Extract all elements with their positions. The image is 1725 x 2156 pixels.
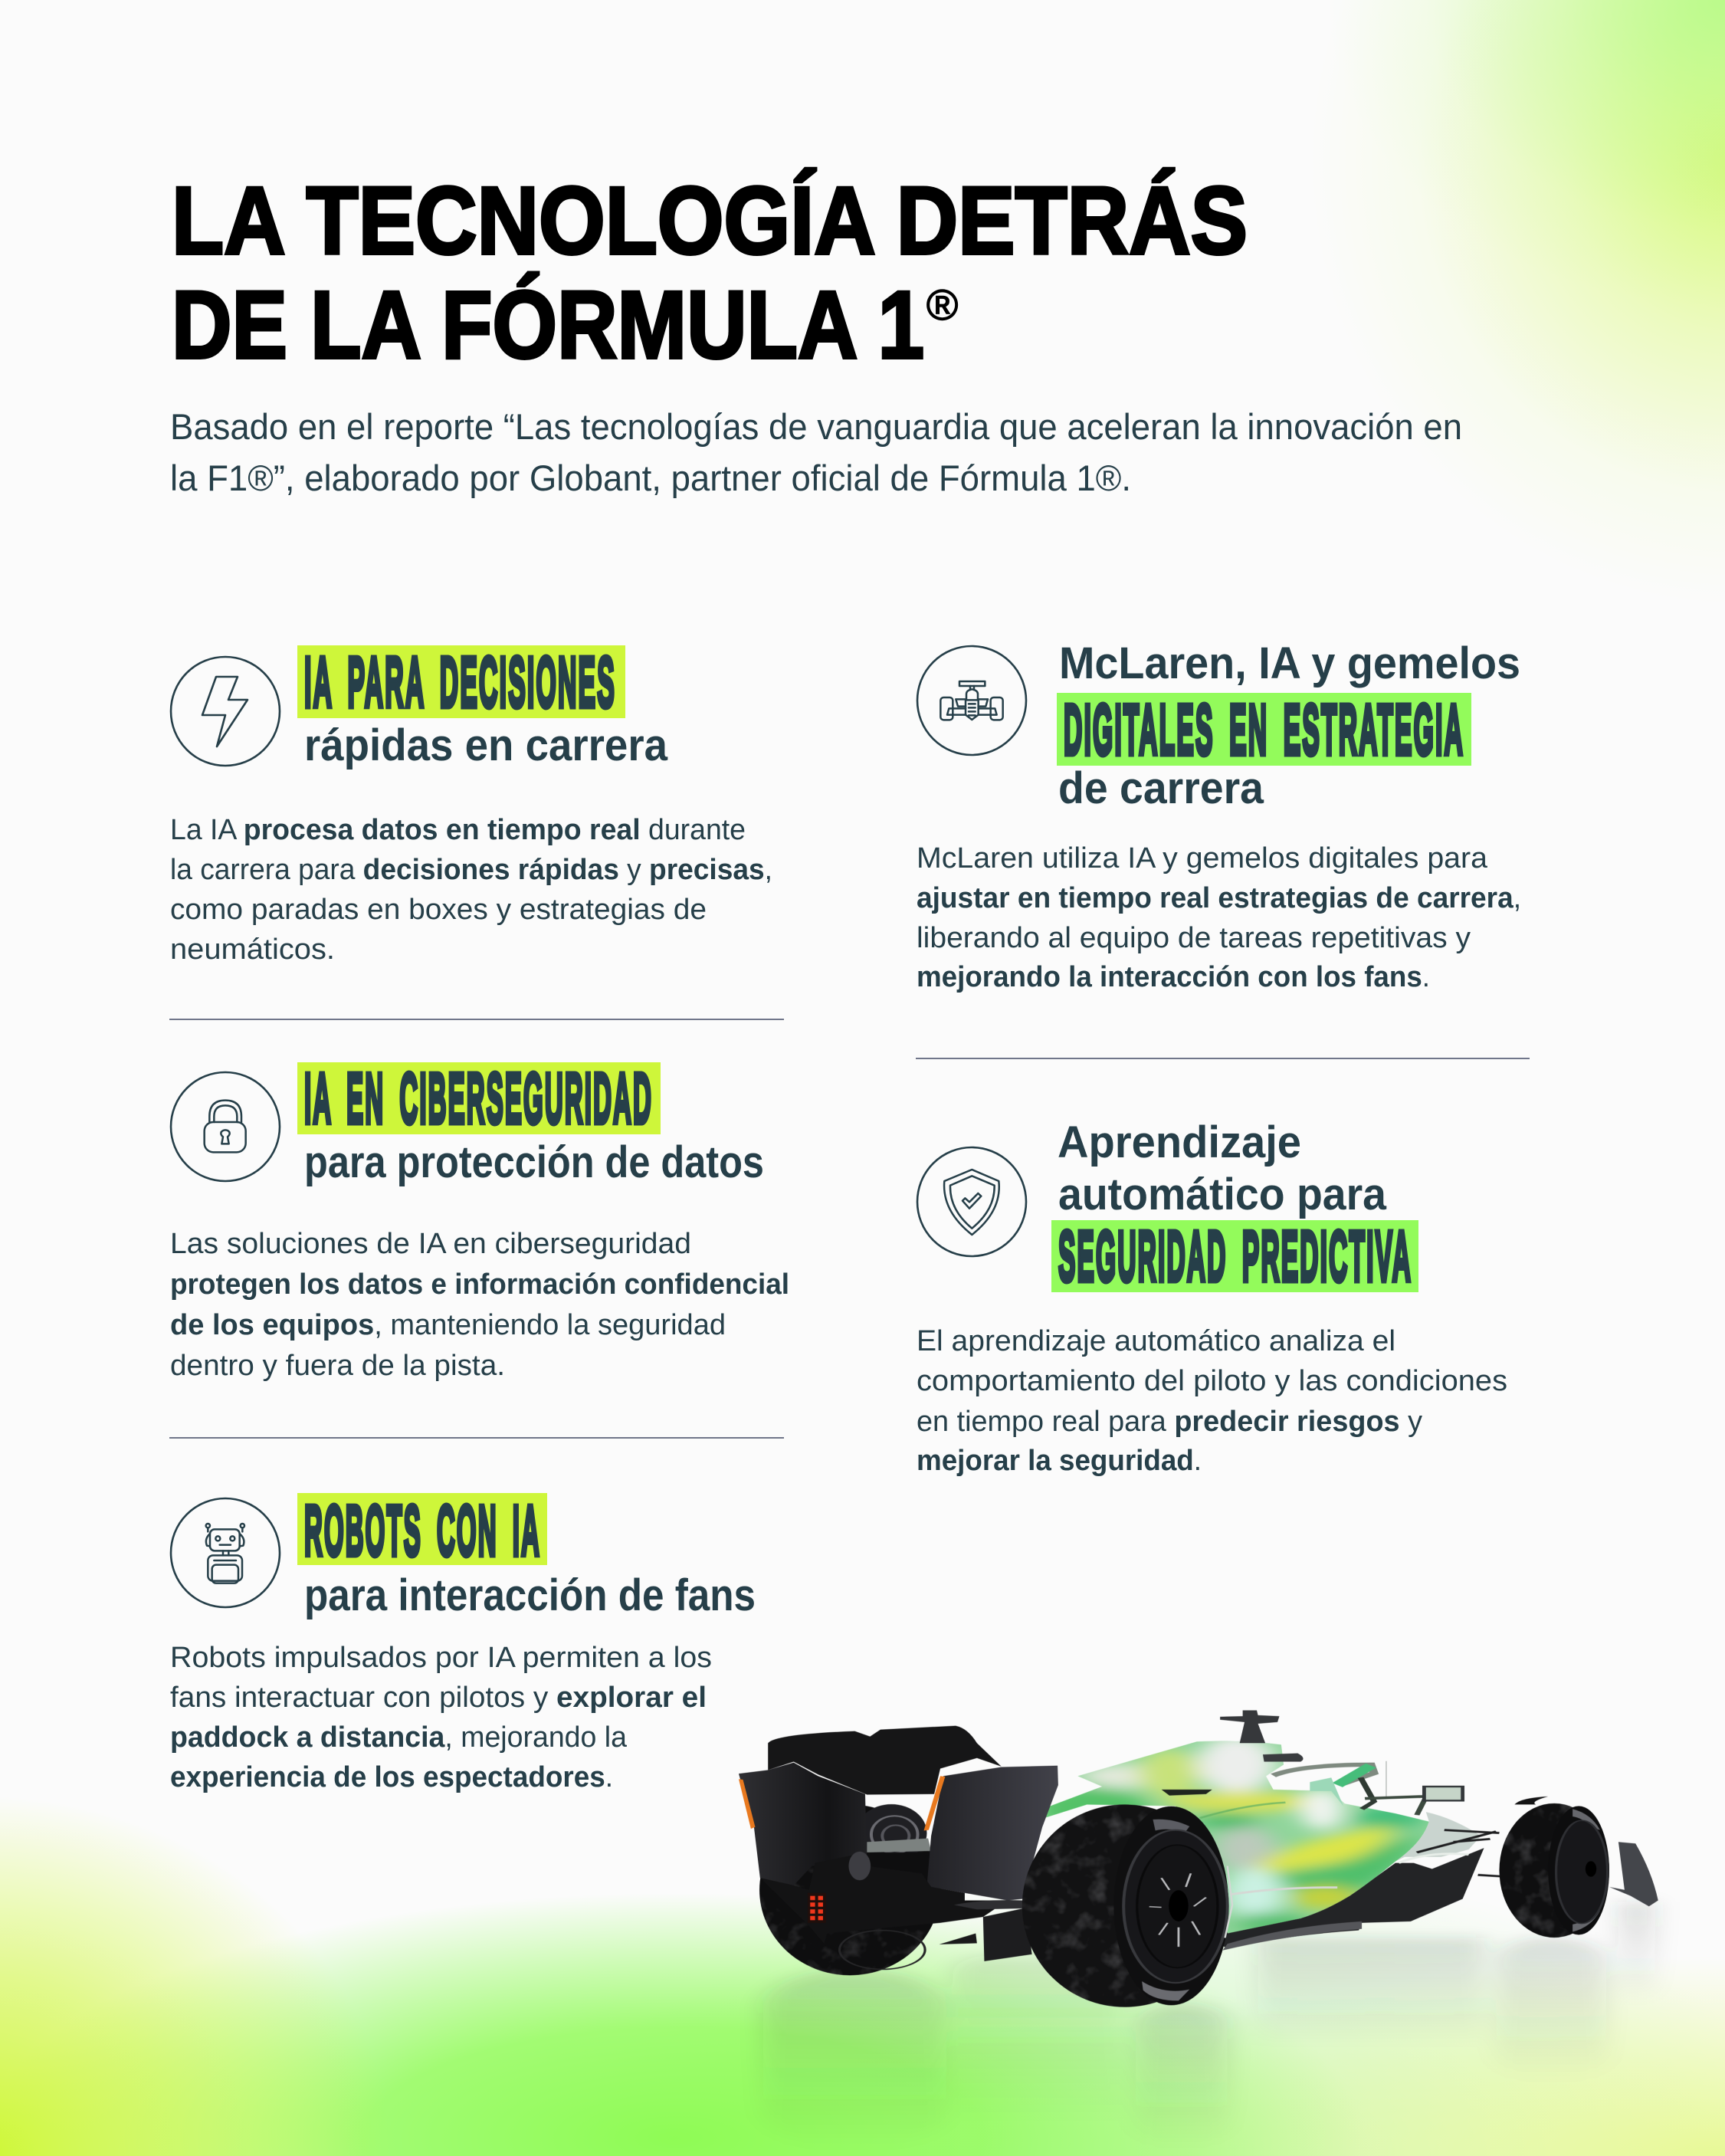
icon: shield <box>917 1147 1026 1256</box>
heading: McLaren, IA y gemelos digitales en estrategia de carrera: McLaren, IA y gemelos <box>1059 638 1520 688</box>
heading: robots con IA para interacción de fans <box>297 1491 756 1620</box>
mirror <box>1365 1787 1463 1815</box>
body text: Las soluciones de IA en ciberseguridad <box>170 1228 691 1260</box>
heading: aprendizaje automático para seguridad predictiva: Aprendizaje <box>1058 1117 1301 1167</box>
body text: Robots impulsados por IA permiten a los <box>170 1642 712 1674</box>
text: mejorar la seguridad. <box>917 1445 1202 1477</box>
floor and sidepod underside <box>1218 1848 1484 1948</box>
car reflection <box>763 1902 1655 2151</box>
diffuser and rain light <box>760 1852 1032 1961</box>
title <box>172 168 1248 379</box>
F1 car illustration <box>739 1710 1658 2151</box>
icon: race car <box>917 646 1026 755</box>
text: paddock a distancia, mejorando la <box>170 1721 628 1754</box>
heading: McLaren, IA y gemelos digitales en estrategia de carrera: de carrera <box>1058 763 1264 813</box>
text: de los equipos, manteniendo la seguridad <box>170 1309 726 1341</box>
panel: McLaren <box>917 638 1520 875</box>
heading: aprendizaje automático para seguridad predictiva <box>1051 1117 1418 1296</box>
text: experiencia de los espectadores. <box>170 1761 613 1793</box>
panel: IA para decisiones <box>170 642 746 846</box>
text: neumáticos. <box>170 934 335 966</box>
subtitle <box>170 406 1462 498</box>
front wheel <box>1499 1797 1609 1938</box>
panel: IA en ciberseguridad <box>170 1058 764 1260</box>
title: DE LA FÓRMULA 1 <box>172 272 924 379</box>
main rear wheel <box>1022 1804 1232 2007</box>
subtitle: la F1®”, elaborado por Globant, partner oficial de Fórmula 1®. <box>170 458 1131 498</box>
icon: lightning bolt <box>171 657 280 766</box>
heading: robots con IA para interacción de fans: para interacción de fans <box>304 1570 756 1620</box>
title: LA TECNOLOGÍA DETRÁS <box>172 168 1248 274</box>
panel: IA para decisiones: IA PARA DECISIONES <box>304 642 616 722</box>
panel: robots con IA <box>170 1491 756 1674</box>
text: protegen los datos e información confidencial <box>170 1268 789 1301</box>
title: ® <box>926 281 958 329</box>
front wing <box>1609 1842 1658 1906</box>
heading: IA para decisiones rápidas en carrera: rápidas en carrera <box>304 720 668 770</box>
heading: IA en ciberseguridad para protección de datos <box>297 1058 764 1187</box>
heading: aprendizaje automático para seguridad predictiva: automático para <box>1058 1170 1387 1219</box>
text: mejorando la interacción con los fans. <box>917 961 1430 993</box>
text: la carrera para decisiones rápidas y precisas, <box>170 854 772 886</box>
subtitle: Basado en el reporte “Las tecnologías de vanguardia que aceleran la innovación en <box>170 406 1462 447</box>
text: ajustar en tiempo real estrategias de carrera, <box>917 882 1521 914</box>
heading: McLaren, IA y gemelos digitales en estrategia de carrera <box>1057 638 1520 813</box>
rear wing <box>739 1726 1058 1900</box>
icon: robot <box>171 1498 280 1607</box>
body text: La IA procesa datos en tiempo real durante <box>170 814 746 846</box>
halo and cockpit <box>1273 1761 1386 1809</box>
text: como paradas en boxes y estrategias de <box>170 894 707 926</box>
text: en tiempo real para predecir riesgos y <box>917 1406 1422 1438</box>
heading: IA para decisiones rápidas en carrera <box>297 642 668 770</box>
text: fans interactuar con pilotos y explorar el <box>170 1682 707 1714</box>
icon: padlock <box>171 1072 280 1181</box>
text: comportamiento del piloto y las condiciones <box>917 1365 1507 1397</box>
camera mount and airbox fins <box>1220 1710 1304 1762</box>
body text: El aprendizaje automático analiza el <box>917 1325 1395 1357</box>
body text: McLaren utiliza IA y gemelos digitales para <box>917 842 1488 875</box>
nose <box>1395 1812 1481 1862</box>
front suspension <box>1417 1830 1502 1876</box>
heading: IA en ciberseguridad para protección de datos: para protección de datos <box>304 1137 764 1187</box>
car body with green livery <box>1038 1735 1441 1938</box>
heading: robots con IA para interacción de fans: ROBOTS CON IA <box>304 1491 541 1570</box>
text: dentro y fuera de la pista. <box>170 1350 505 1382</box>
text: liberando al equipo de tareas repetitivas y <box>917 922 1471 954</box>
far rear wheel <box>759 1804 940 1975</box>
text: IA EN CIBERSEGURIDAD <box>304 1058 653 1138</box>
panel: aprendizaje automático <box>917 1117 1418 1357</box>
